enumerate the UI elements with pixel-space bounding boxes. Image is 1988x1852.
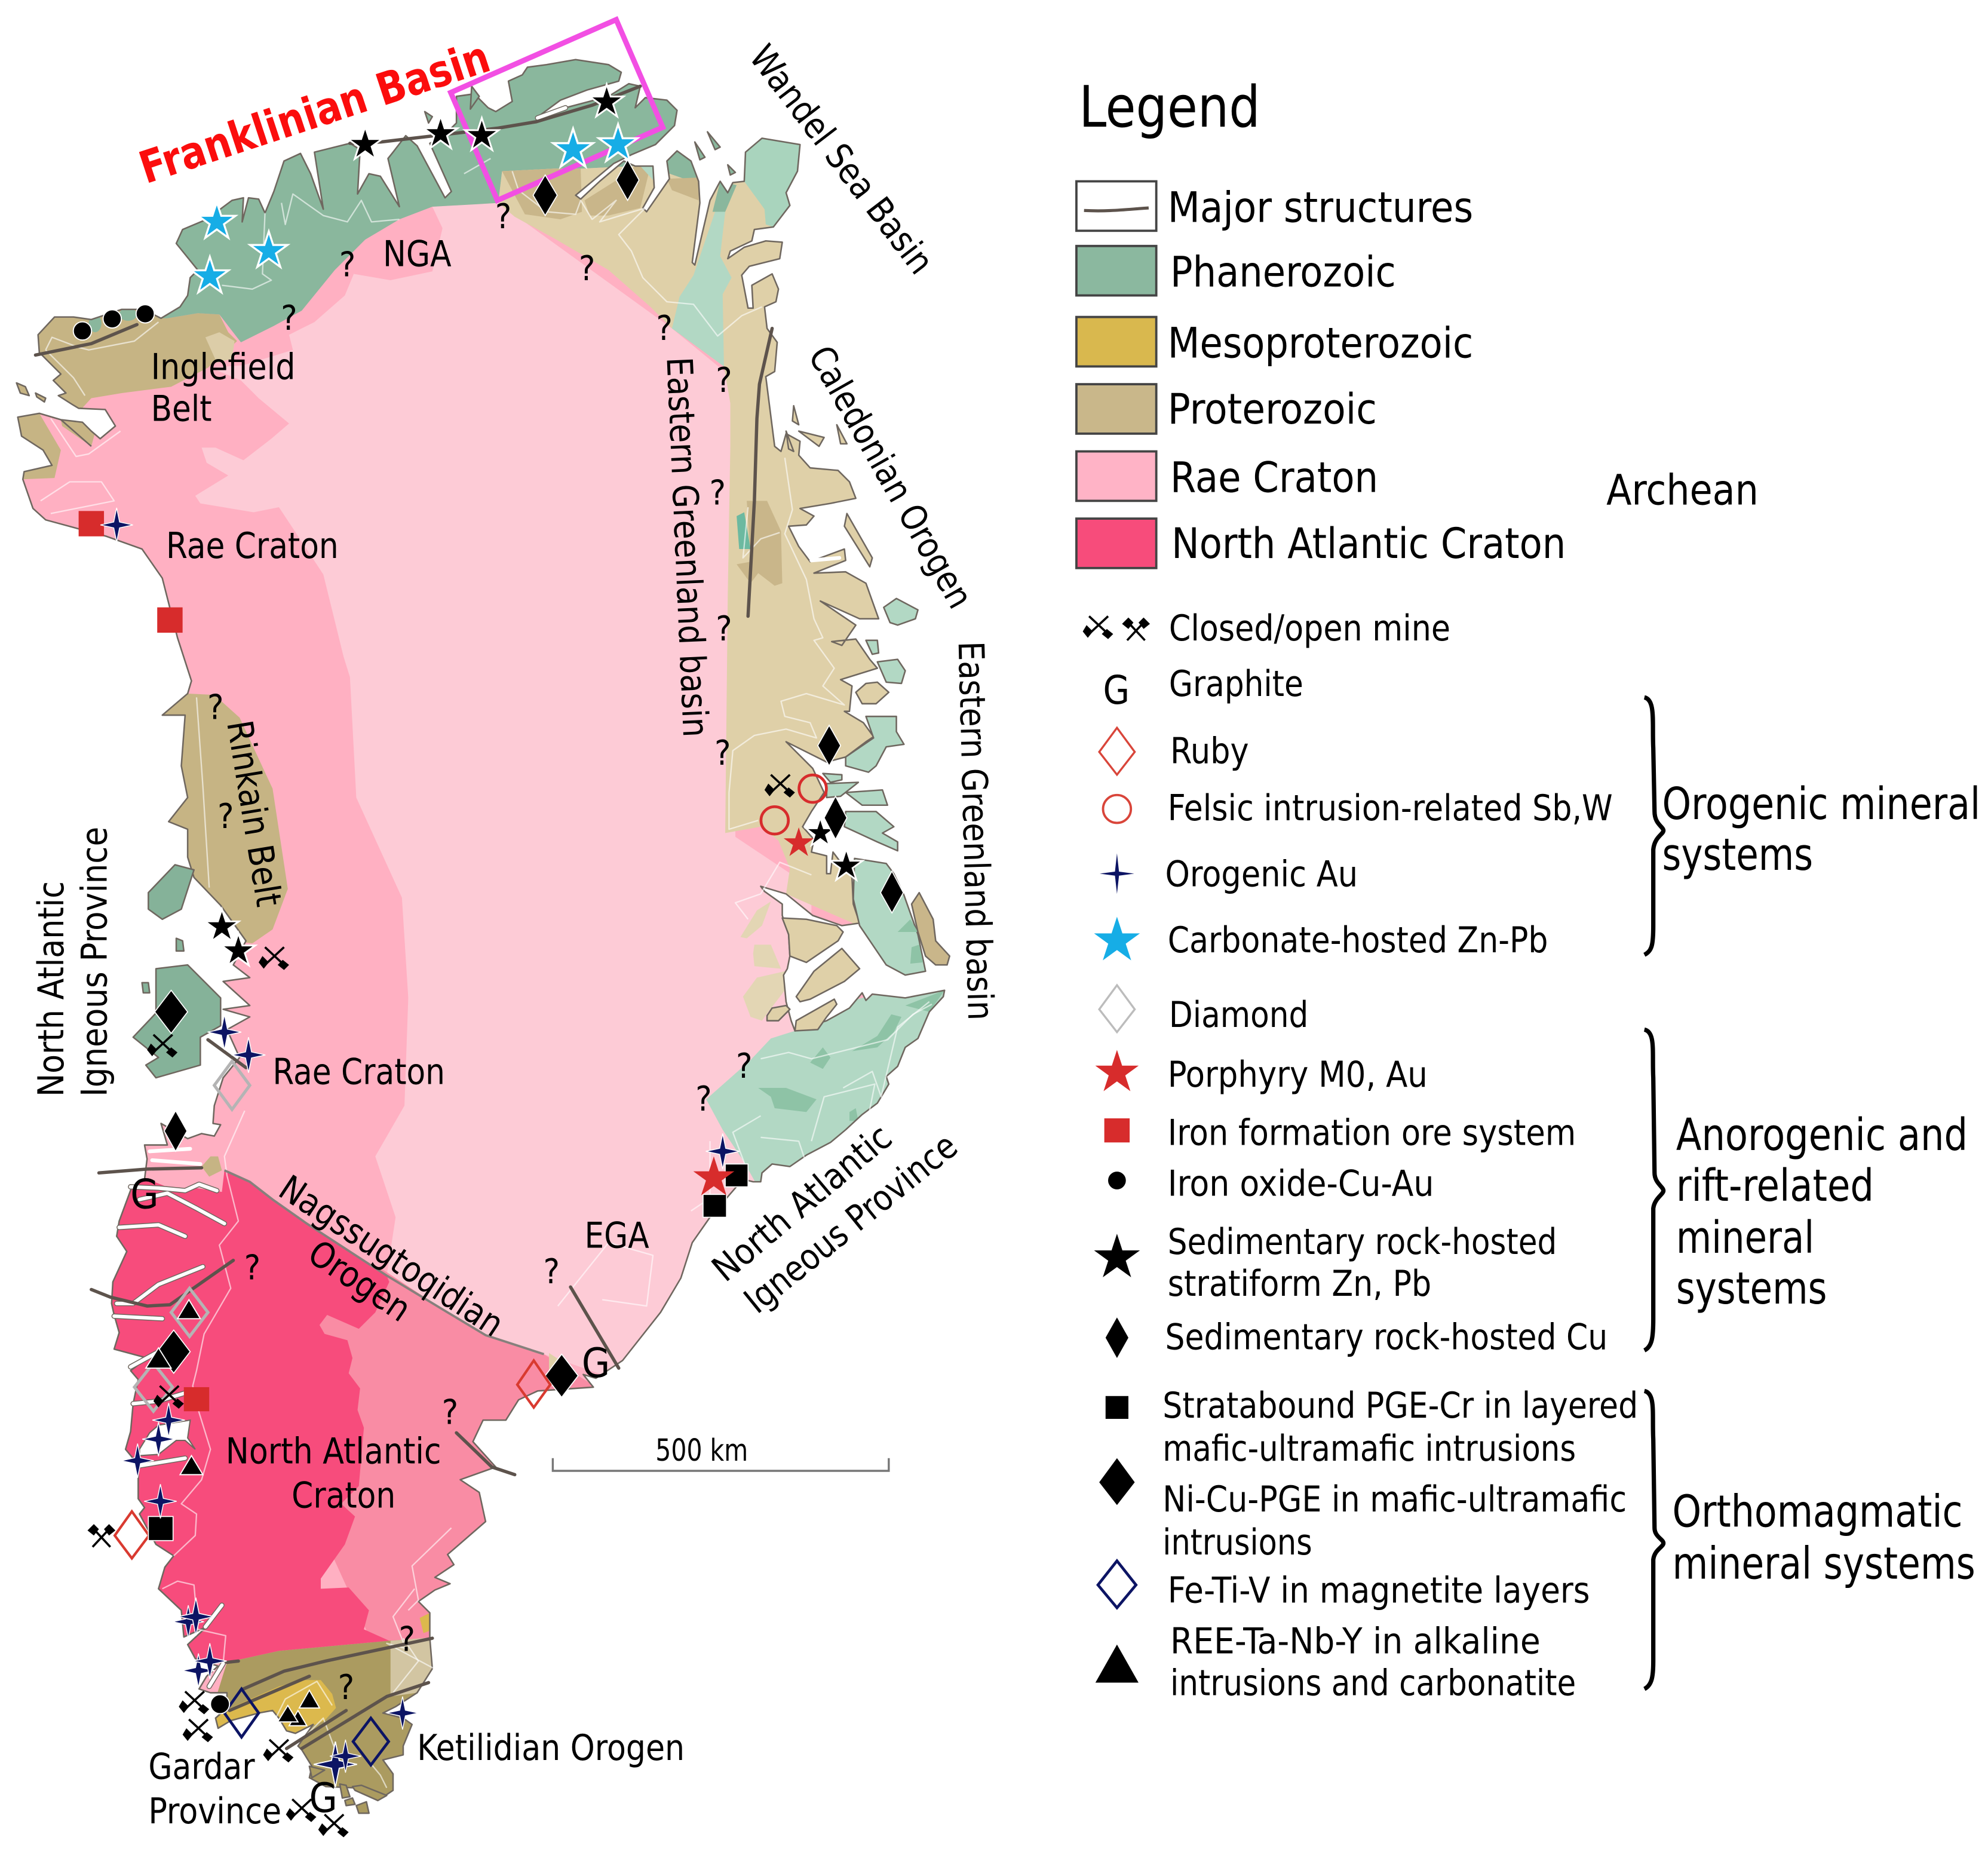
islands: darker patches on big eastern island — [898, 919, 923, 964]
markers: uncertain boundary question marks: ? — [442, 1392, 458, 1432]
region: North Atlantic Craton — [112, 1170, 389, 1662]
region: NW Proterozoic strip — [18, 413, 95, 479]
coastline outline — [18, 60, 944, 1801]
islands: eastern fringe Proterozoic — [912, 893, 950, 965]
markers: porphyry red stars — [694, 827, 814, 1195]
markers: navy Fe-Ti-V diamonds — [225, 1689, 389, 1765]
region: light Ketilidian east — [391, 1638, 431, 1697]
markers: uncertain boundary question marks: ? — [495, 197, 511, 237]
markers: uncertain boundary question marks: ? — [714, 733, 731, 773]
group label: anorogenic and rift-related mineral systems — [1676, 1109, 1968, 1314]
map label: Caledonian Orogen: Caledonian Orogen — [800, 339, 980, 615]
islands: NW — [17, 383, 45, 402]
legend row: sedimentary stratiform: stratiform Zn, Pb — [1168, 1264, 1431, 1305]
map label: Eastern Greenland basin east: Eastern Greenland basin — [950, 641, 1001, 1021]
legend row: porphyry: Porphyry M0, Au — [1168, 1054, 1428, 1096]
region: pale Inglefield blob — [205, 332, 235, 363]
map label: North Atlantic Igneous Province west: Igneous Province — [74, 827, 115, 1097]
markers: uncertain boundary question marks: ? — [710, 473, 726, 513]
map label: Rae Craton north: Rae Craton — [166, 526, 339, 567]
islands: Disko and Nuussuaq — [133, 864, 220, 1078]
markers: graphite: G — [582, 1340, 610, 1387]
map label: Inglefield Belt — [151, 347, 296, 430]
map label: Wandel Sea Basin: Wandel Sea Basin — [741, 38, 941, 282]
markers: graphite — [130, 1172, 610, 1822]
markers: uncertain boundary question marks: ? — [544, 1252, 560, 1292]
legend row: closed/open mine: Closed/open mine — [1169, 608, 1450, 649]
region: Ketilidian Orogen — [217, 1639, 416, 1795]
region: small green patches at Inglefield — [89, 308, 137, 332]
map label: EGA: EGA — [584, 1215, 649, 1256]
markers: stratabound PGE-Cr squares — [148, 1164, 748, 1541]
markers: uncertain boundary question marks: ? — [281, 298, 297, 338]
map label: North Atlantic Igneous Province west: North Atlantic — [31, 881, 72, 1097]
legend row: sedimentary stratiform: Sedimentary rock-hosted — [1168, 1222, 1557, 1263]
legend row: sedimentary Cu: Sedimentary rock-hosted Cu — [1165, 1317, 1607, 1358]
markers: closed and open mines — [87, 775, 795, 1837]
region: Proterozoic inlier — [737, 501, 783, 586]
map label: Inglefield Belt: Inglefield — [151, 347, 296, 388]
ice margin contours — [41, 158, 932, 1788]
map label: Eastern Greenland basin west: Eastern Greenland basin — [658, 356, 716, 738]
map label: Nagssugtoqidian Orogen: Orogen — [300, 1232, 418, 1330]
legend row: graphite: Graphite — [1169, 664, 1303, 705]
legend row: Phanerozoic — [1076, 246, 1396, 297]
legend row: stratabound: mafic-ultramafic intrusions — [1162, 1428, 1576, 1470]
legend row: Ni-Cu-PGE: intrusions — [1162, 1522, 1312, 1563]
fjords: white channels — [114, 108, 566, 1687]
legend title: Legend — [1079, 73, 1260, 140]
legend row: sedimentary stratiform — [1094, 1222, 1557, 1305]
legend row: Rae Craton: Rae Craton — [1170, 453, 1378, 502]
region: eastern Proterozoic — [498, 158, 888, 939]
scale bar — [553, 1433, 889, 1471]
map label: Rae Craton south: Rae Craton — [272, 1052, 445, 1093]
fjords: open-water patch near Godthaab — [139, 1420, 195, 1456]
markers: diamond occurrences — [134, 1061, 250, 1411]
group label: anorogenic and rift-related mineral systems: mineral — [1676, 1212, 1814, 1264]
map label: Rinkain Belt: Rinkain Belt — [218, 718, 289, 909]
legend row: REE: REE-Ta-Nb-Y in alkaline — [1170, 1621, 1541, 1663]
group label: anorogenic and rift-related mineral systems: Anorogenic and — [1676, 1109, 1968, 1161]
markers: iron oxide dots — [73, 305, 229, 1713]
group label: orthomagmatic mineral systems — [1672, 1485, 1975, 1589]
legend row: stratabound — [1106, 1385, 1638, 1470]
markers: uncertain boundary question marks: ? — [338, 1667, 354, 1707]
markers: uncertain boundary question marks: ? — [244, 1248, 260, 1288]
markers: uncertain boundary question marks: ? — [399, 1619, 415, 1659]
legend row: diamond — [1099, 985, 1308, 1036]
map of Greenland — [0, 0, 1014, 1851]
legend row: graphite: G — [1103, 667, 1130, 713]
markers: uncertain boundary question marks: ? — [656, 308, 673, 348]
fjords: peninsula channels — [149, 558, 839, 1164]
legend row: Proterozoic: Proterozoic — [1168, 385, 1377, 434]
map label: North Atlantic Igneous Province west — [31, 827, 115, 1097]
brace: orogenic systems — [1645, 697, 1664, 955]
region: small Mesoproterozoic patch — [419, 1613, 429, 1633]
region: dark Phanerozoic wedge — [713, 182, 737, 211]
map label: North Atlantic Craton — [226, 1431, 441, 1517]
region: SE tan patch — [549, 1353, 565, 1376]
islands: lens island — [856, 682, 889, 704]
markers: uncertain boundary question marks — [207, 197, 753, 1707]
markers: uncertain boundary question marks: ? — [207, 687, 224, 727]
markers: uncertain boundary question marks: ? — [716, 360, 732, 400]
markers: triangles REE-Ta-Nb-Y — [146, 1299, 320, 1726]
map label: Inglefield Belt: Belt — [151, 389, 211, 430]
markers: graphite: G — [309, 1775, 338, 1822]
legend row: iron oxide: Iron oxide-Cu-Au — [1168, 1163, 1434, 1204]
map label: North Atlantic Craton: North Atlantic — [226, 1431, 441, 1472]
fjords — [61, 108, 839, 1687]
legend row: ruby: Ruby — [1170, 731, 1249, 772]
brace: orthomagmatic systems — [1645, 1391, 1664, 1689]
legend row: Fe-Ti-V — [1098, 1561, 1590, 1612]
region: darker northern Proterozoic — [502, 166, 698, 219]
region: Rae coastal patch — [201, 1157, 222, 1177]
islands: southern tip — [309, 1767, 386, 1813]
legend row: Ni-Cu-PGE: Ni-Cu-PGE in mafic-ultramafic — [1162, 1479, 1627, 1520]
legend row: Ni-Cu-PGE — [1099, 1458, 1627, 1563]
legend row: Fe-Ti-V: Fe-Ti-V in magnetite layers — [1168, 1571, 1590, 1612]
group label: orogenic mineral systems: systems — [1662, 829, 1813, 881]
group label: orthomagmatic mineral systems: Orthomagmatic — [1672, 1485, 1963, 1537]
legend row: stratabound: Stratabound PGE-Cr in layered — [1162, 1385, 1638, 1427]
markers: uncertain boundary question marks: ? — [579, 249, 595, 289]
scale bar: 500 km — [655, 1433, 748, 1468]
markers: uncertain boundary question marks: ? — [716, 609, 732, 649]
group label: orogenic mineral systems — [1662, 778, 1980, 881]
map label: Ketilidian Orogen: Ketilidian Orogen — [417, 1728, 685, 1769]
region: Rae Craton interior — [195, 203, 811, 1395]
region: Rinkian Belt — [165, 694, 288, 943]
region: northern Phanerozoic — [152, 38, 710, 342]
geological regions clipped to the coastline — [18, 60, 944, 1795]
markers: sedimentary rock-hosted Cu diamonds — [164, 160, 903, 1151]
markers: orogenic gold — [100, 508, 740, 1787]
fjords: gray casing — [114, 108, 566, 1687]
legend row: Proterozoic — [1076, 384, 1377, 434]
heading: Franklinian Basin: Franklinian Basin — [133, 30, 496, 194]
markers: uncertain boundary question marks: ? — [339, 245, 355, 285]
region: light Phanerozoic strip — [672, 211, 732, 366]
brace: anorogenic systems — [1645, 1029, 1664, 1350]
legend row: Mesoproterozoic: Mesoproterozoic — [1168, 319, 1473, 368]
map label: North Atlantic Igneous Province east: Igneous Province — [737, 1126, 965, 1322]
legend row: major structures: Major structures — [1168, 183, 1473, 232]
region: Phanerozoic inlier — [737, 512, 750, 549]
markers: sedimentary rock-hosted stratiform Zn-Pb stars — [205, 84, 863, 965]
legend row: iron formation: Iron formation ore system — [1168, 1113, 1576, 1154]
region: Gardar Mesoproterozoic — [216, 1680, 336, 1734]
group label: anorogenic and rift-related mineral systems: rift-related — [1676, 1160, 1874, 1212]
markers: uncertain boundary question marks: ? — [736, 1046, 753, 1086]
legend row: felsic intrusion: Felsic intrusion-related Sb,W — [1168, 788, 1613, 829]
markers: uncertain boundary question marks: ? — [217, 796, 234, 836]
markers: Ni-Cu-PGE diamonds — [155, 991, 578, 1397]
legend — [1076, 73, 1980, 1704]
legend row: Rae Craton — [1076, 452, 1378, 502]
region: Inglefield Belt — [25, 304, 237, 412]
legend note: Archean: Archean — [1606, 466, 1759, 515]
region: reworked eastern North Atlantic Craton — [320, 1269, 592, 1642]
map label: Gardar Province: Province — [148, 1791, 281, 1832]
map label: Nagssugtoqidian Orogen: Nagssugtoqidian — [271, 1167, 511, 1345]
legend row: carbonate-hosted: Carbonate-hosted Zn-Pb — [1168, 920, 1548, 961]
map label: Gardar Province: Gardar — [148, 1747, 255, 1788]
region: Scoresby Phanerozoic — [706, 976, 964, 1192]
markers: felsic intrusion circles — [761, 775, 826, 834]
region: small light Phanerozoic inlet — [640, 166, 654, 182]
legend row: graphite — [1103, 664, 1303, 713]
legend row: North Atlantic Craton: North Atlantic Craton — [1171, 519, 1566, 568]
legend row: REE — [1096, 1621, 1576, 1704]
major structures — [35, 86, 772, 1749]
markers: graphite: G — [130, 1172, 159, 1219]
region: pale Proterozoic on Rae margin — [741, 902, 785, 1021]
highlight box: Franklinian Basin study area — [451, 20, 662, 200]
fjords: gray inlet line NW — [61, 420, 91, 446]
markers: carbonate-hosted Zn-Pb stars — [191, 124, 637, 292]
islands: north coast — [425, 86, 735, 175]
legend row: diamond: Diamond — [1169, 995, 1308, 1036]
map label: Gardar Province — [148, 1747, 281, 1832]
legend row: Phanerozoic: Phanerozoic — [1170, 248, 1396, 297]
legend row: orogenic gold: Orogenic Au — [1165, 854, 1358, 896]
markers: ruby diamonds — [115, 1360, 550, 1558]
region: Wandel Sea peninsula — [744, 138, 800, 227]
islands: lower eastern Proterozoic blocks — [767, 918, 860, 1031]
legend row: REE: intrusions and carbonatite — [1170, 1663, 1576, 1704]
legend row: ruby — [1099, 728, 1249, 775]
region: darker Scoresby patches — [758, 991, 944, 1121]
markers: uncertain boundary question marks: ? — [695, 1079, 712, 1119]
islands: eastern Phanerozoic — [823, 599, 925, 975]
region: western Rae Craton — [24, 166, 875, 1692]
islands — [17, 86, 950, 1813]
islands: NE tan islets — [786, 406, 872, 567]
map label: North Atlantic Igneous Province east: North Atlantic — [704, 1117, 900, 1290]
map label: NGA: NGA — [383, 234, 452, 275]
group label: anorogenic and rift-related mineral systems: systems — [1676, 1262, 1827, 1314]
map label: North Atlantic Craton: Craton — [292, 1476, 395, 1517]
markers: iron formation squares — [79, 511, 209, 1411]
